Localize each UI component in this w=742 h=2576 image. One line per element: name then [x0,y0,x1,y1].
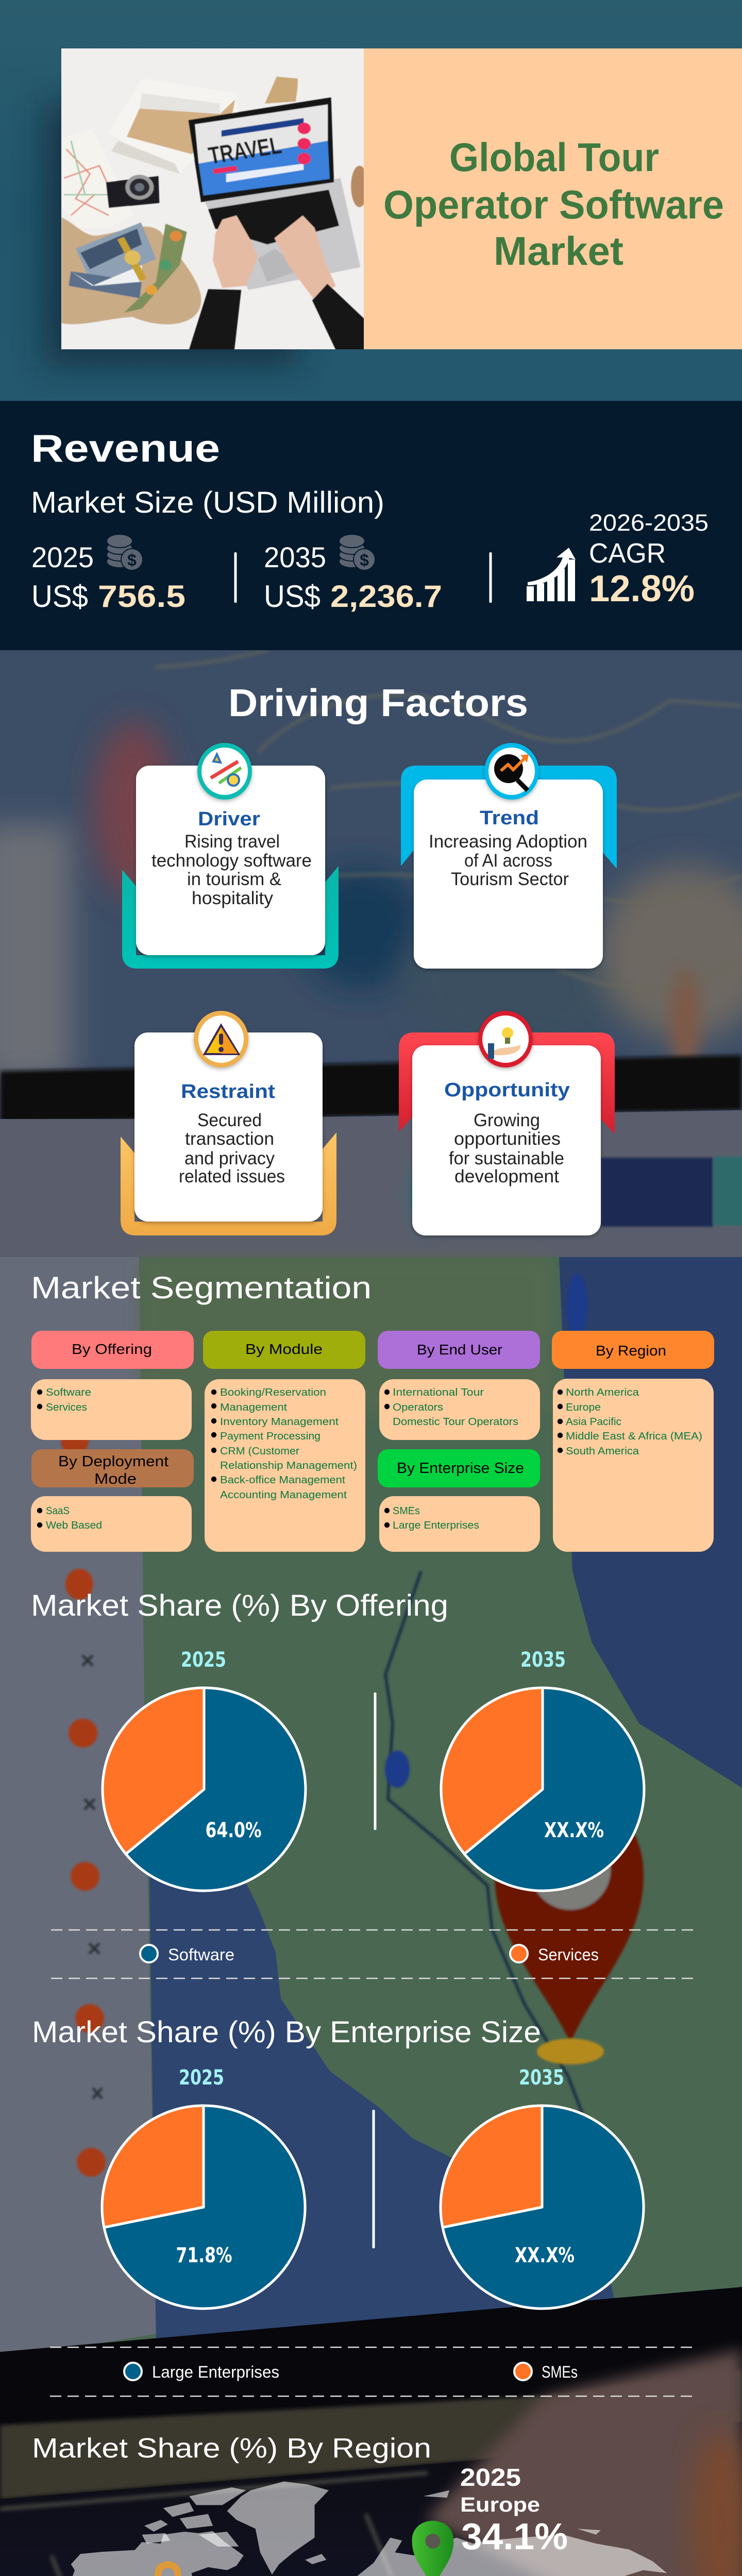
driver text: Rising travel [184,832,280,852]
driver text: technology software [151,851,312,871]
chart: offering 2025 pie: 64.0% [205,1819,262,1842]
module list: CRM (Customer [220,1446,299,1457]
laptop bezel and keyboard [0,2287,742,2576]
chart: enterprise size 2025 pie: 71.8% [176,2244,232,2267]
end user list [384,1387,518,1428]
stat: 2035 revenue: 2,236.7 [330,579,442,614]
callout: europe share: 2025 [460,2464,521,2492]
coaster [351,166,368,207]
trend text: Tourism Sector [451,869,569,889]
stat: CAGR: 2026-2035 [589,510,709,536]
icon: restraint [194,1011,248,1067]
restraint text: related issues [179,1166,285,1187]
title [383,134,724,274]
panel: trend card: Trend [480,807,539,829]
legend: offering: Services [538,1945,599,1964]
enterprise list: SMEs [393,1505,420,1517]
pin: europe [412,2521,453,2576]
camera [106,175,159,208]
enterprise list: Large Enterprises [393,1520,479,1531]
legend: enterprise size: SMEs [542,2363,578,2381]
deployment list [37,1505,102,1531]
stat: 2035 revenue: 2035 [264,541,326,573]
chart: enterprise size 2035 pie: XX.X% [515,2244,575,2267]
legend: enterprise size [50,2347,694,2396]
chart: offering 2035 pie: XX.X% [544,1819,604,1842]
panel: driver card [122,743,339,969]
restraint text: and privacy [184,1148,275,1168]
big red location pin [495,1793,644,2064]
icon: opportunity [478,1011,533,1067]
icon: coins [339,534,375,570]
module list: Booking/Reservation [220,1387,326,1398]
end user list: Operators [393,1402,443,1413]
chart: enterprise size 2035 pie: 2035 [519,2066,564,2090]
offering list: Software [46,1387,91,1398]
trend text: of AI across [464,851,552,871]
wrist watch [117,237,147,282]
icon: coins: $ [360,551,369,569]
stat: CAGR [589,510,709,609]
chart: offering 2025 pie: 2025 [181,1648,226,1672]
icon: trend [484,743,539,800]
world map [71,2481,667,2576]
icon: coins [107,534,143,570]
stat: 2025 revenue: US$ [31,579,88,614]
crochet strap [124,224,187,313]
heading: market share by offering: Market Share (%) By Offering [31,1589,448,1622]
title: Global Tour [449,134,659,180]
icon: coins: $ [127,551,137,569]
driving factors blurred backdrop [0,650,742,1082]
restraint text: transaction [185,1129,274,1149]
map road [385,1571,582,2113]
opportunity text: development [454,1166,559,1187]
title: Market [494,228,623,274]
stat: 2025 revenue: 756.5 [98,579,185,614]
offering list [37,1387,91,1413]
region list: North America [566,1387,639,1398]
module list: Back-office Management [220,1475,345,1486]
callout: europe share: Europe [460,2494,540,2516]
stat: 2035 revenue: US$ [264,579,321,614]
module list: Management [220,1402,287,1413]
stat: CAGR: 12.8% [589,568,695,609]
screen fragments [407,1157,742,1231]
panel: by region: By Region [596,1343,666,1359]
letters and envelopes [109,75,303,174]
panel: driver card: Driver [198,808,260,830]
driver text: in tourism & [187,869,281,889]
chart: offering 2035 pie: 2035 [520,1648,566,1672]
region list: Asia Pacific [566,1416,621,1428]
pin: north america [155,2561,181,2576]
typing hands [188,215,366,352]
panel: by region [552,1331,714,1552]
module list: Inventory Management [220,1416,339,1428]
map: left panel, land and sea [0,1257,742,2391]
panel: by end user [378,1331,540,1440]
panel: revenue [0,401,742,650]
region list: Europe [566,1402,601,1413]
enterprise list [384,1505,479,1531]
deployment list: SaaS [46,1505,70,1517]
region list [558,1387,702,1457]
driver text [151,832,312,908]
laptop [188,97,361,290]
module list: Relationship Management) [220,1460,357,1471]
offering list: Services [46,1402,87,1413]
chart: enterprise size 2025 pie [102,2066,305,2309]
deployment list: Web Based [46,1520,102,1531]
region list: Middle East & Africa (MEA) [566,1431,702,1442]
chart: offering 2035 pie [441,1648,644,1891]
module list [211,1387,357,1501]
heading: market share by enterprise size: Market Share (%) By Enterprise Size [32,2015,541,2049]
blue map pins [385,1274,587,1788]
black monitor bar [0,1055,742,1122]
heading: market segmentation: Market Segmentation [31,1270,372,1305]
stat: 2025 revenue [31,534,185,614]
legend: enterprise size: Large Enterprises [152,2363,279,2381]
icon: growth arrow [527,548,576,601]
module list: Accounting Management [220,1489,347,1501]
driver text: hospitality [192,888,274,908]
panel: by enterprise size: By Enterprise Size [397,1460,524,1477]
legend: offering: Software [168,1945,234,1964]
chart: offering 2025 pie [103,1648,306,1891]
trend text [429,832,587,889]
callout: europe share: 34.1% [461,2516,568,2557]
end user list: Domestic Tour Operators [393,1416,518,1428]
end user list: International Tour [393,1387,484,1398]
net bag [61,217,201,324]
opportunity text [449,1110,564,1187]
header background [0,0,742,401]
chart: enterprise size 2025 pie: 2025 [179,2066,224,2090]
panel: by module [203,1331,365,1552]
road map [61,128,133,228]
stat: 2035 revenue [264,534,442,614]
panel: by deployment mode [31,1449,194,1552]
restraint text [179,1110,285,1187]
panel: restraint card: Restraint [181,1081,275,1103]
panel: by offering [31,1331,194,1440]
module list: Payment Processing [220,1431,321,1442]
region list: South America [566,1446,639,1457]
callout: europe share [460,2464,568,2557]
icon: driver [197,743,252,800]
heading: driving factors: Driving Factors [228,681,528,724]
panel: opportunity card [399,1011,615,1235]
title panel [364,48,742,349]
laptop: TRAVEL [206,131,284,169]
opportunity text: opportunities [454,1129,561,1149]
stat: CAGR: CAGR [589,538,666,569]
panel: by enterprise size [378,1449,540,1552]
panel: by end user: By End User [417,1342,502,1358]
blurred photo background [0,650,742,2576]
panel: by deployment mode: Mode [94,1471,137,1487]
map pins: red dots on sidebar [61,1427,106,2177]
panel: by offering: By Offering [72,1341,152,1357]
photos [69,223,156,298]
opportunity text: for sustainable [449,1148,564,1168]
title: Operator Software [383,182,724,227]
panel: opportunity card: Opportunity [444,1079,570,1101]
stat: 2025 revenue: 2025 [31,541,94,573]
hero photo: travel laptop on desk [61,48,368,352]
heading: market share by region: Market Share (%) By Region [32,2433,431,2464]
restraint text: Secured [197,1110,262,1130]
panel: by module: By Module [245,1341,323,1357]
panel: trend card [401,743,617,969]
panel: restraint card [121,1011,336,1235]
panel: by deployment mode: By Deployment [58,1453,168,1470]
heading: revenue: Revenue [31,427,220,470]
chart: enterprise size 2035 pie [441,2066,644,2309]
legend: offering [51,1930,695,1978]
trend text: Increasing Adoption [429,832,587,852]
opportunity text: Growing [474,1110,540,1130]
market size label: Market Size (USD Million) [31,486,384,519]
